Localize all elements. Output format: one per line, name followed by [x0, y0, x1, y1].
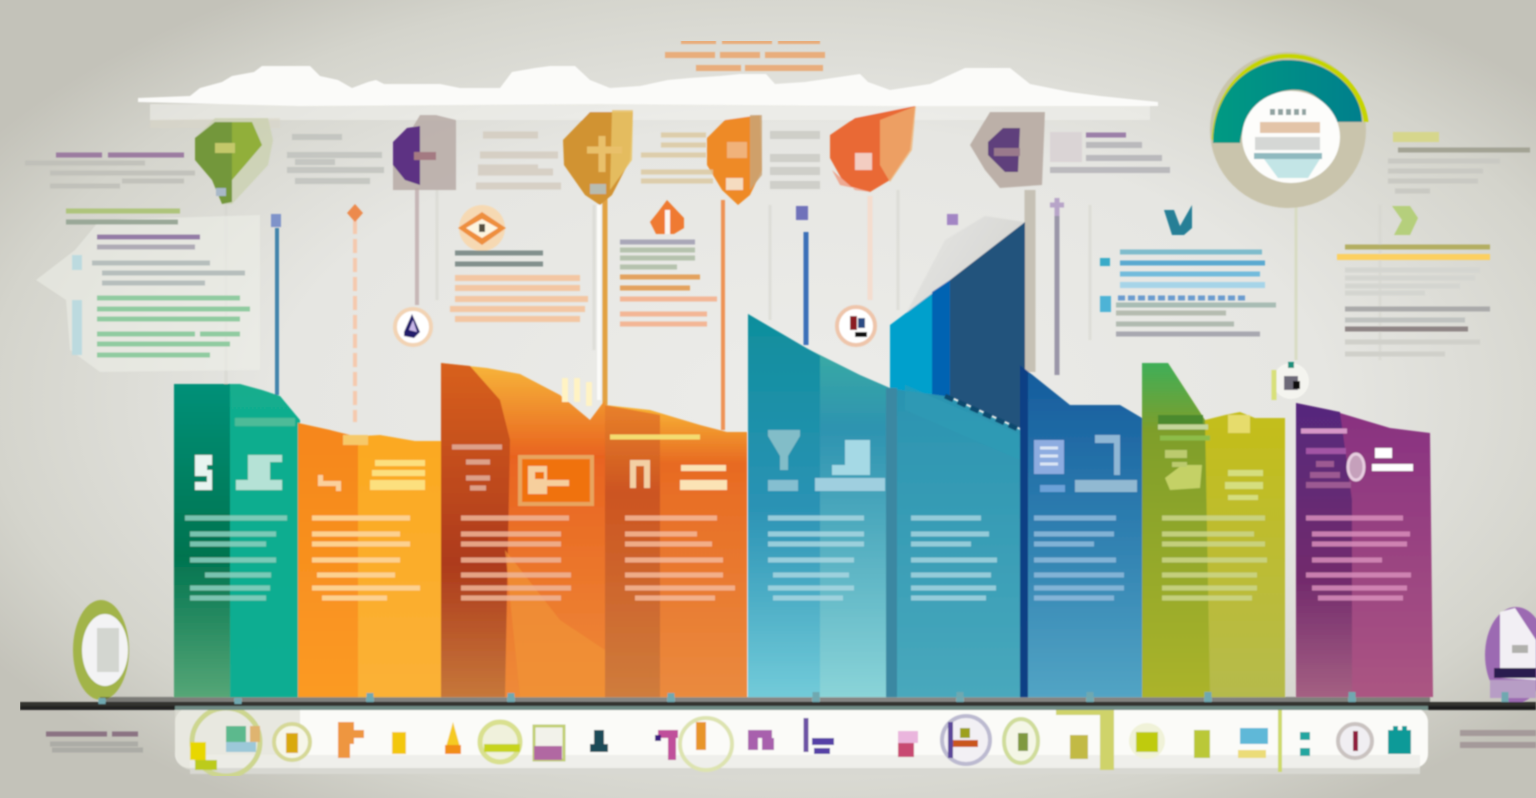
timeline bar: [20, 692, 1536, 710]
faint vertical guide lines: [226, 190, 1380, 385]
icon: funnel: [768, 430, 800, 470]
icon: node green: [1273, 362, 1309, 400]
cloud banner: [138, 66, 1158, 120]
icon: left oval badge: [73, 600, 129, 700]
icon: orange red glyphs: [630, 460, 727, 490]
icon: corner: [1095, 435, 1120, 475]
panel: blue: [1020, 365, 1142, 697]
icon: teal check: [1164, 205, 1192, 235]
text: blue panel: [1034, 518, 1124, 598]
icon: marker orange: [347, 204, 363, 222]
text block: far right list: [1337, 247, 1490, 354]
text: orange panel: [312, 518, 420, 598]
timeline ticks: [102, 692, 1505, 704]
text: deep orange panel: [461, 518, 571, 598]
icon: red ring small: [1338, 724, 1372, 758]
icon: large olive ring: [192, 708, 260, 776]
panel: sky blue: [748, 314, 890, 697]
pin: red orange: [830, 106, 916, 192]
text block: blue list: [1100, 252, 1276, 334]
icon: orange panel glyphs: [318, 460, 425, 491]
panel: purple: [1296, 403, 1433, 697]
text: purple panel: [1306, 518, 1411, 598]
callout: left arrow plate: [36, 215, 260, 372]
icon: marker purple: [947, 214, 958, 225]
label bars: [452, 447, 502, 488]
icon: flame: [445, 722, 461, 750]
panel: orange red: [605, 405, 747, 697]
text block: centre left: [450, 253, 588, 319]
text block: upper mid three: [641, 135, 713, 181]
icon: right oval badge: [1485, 607, 1536, 703]
panel: teal: [174, 384, 300, 697]
label: bottom left: [46, 734, 143, 750]
panel: blue peak background: [890, 216, 1025, 430]
icon: lime: [1129, 723, 1165, 759]
text block: upper mid four: [770, 135, 820, 185]
icon: green leaf: [1392, 206, 1418, 235]
text block: top left body: [25, 163, 195, 186]
icon: sun badge: [458, 205, 506, 251]
label: bottom right: [1460, 733, 1536, 745]
icon: purple flag: [804, 718, 808, 752]
icon: node red: [837, 307, 875, 345]
text block: upper mid one: [287, 137, 384, 181]
pin: amber: [563, 110, 633, 205]
panel: deep orange: [441, 363, 605, 697]
icon: orange block: [338, 722, 364, 758]
icon: node navy: [395, 309, 431, 345]
icon strip: [175, 706, 1428, 776]
icon: dark teal: [590, 730, 608, 752]
icon: olive block: [1056, 706, 1114, 770]
icon: amber ring: [274, 724, 310, 760]
icon: yellow tag: [392, 732, 406, 754]
icon: blue yellow: [1240, 728, 1268, 744]
icon: teal bar: [1388, 726, 1411, 754]
icon: flame badge: [650, 200, 684, 234]
icon: magenta: [658, 730, 678, 760]
icon: lime ring: [480, 722, 520, 762]
panel: orange: [298, 423, 441, 697]
text: teal panel: [185, 518, 287, 598]
text: orange red panel: [625, 518, 735, 598]
icon: marker navy: [796, 206, 808, 220]
text block: far right top: [1388, 132, 1530, 191]
bars: [1040, 485, 1065, 492]
icon: teal panel glyphs: [195, 455, 282, 490]
icon: framed chart: [520, 457, 592, 504]
pin: orange: [707, 115, 762, 205]
icon: purple glyphs: [1306, 448, 1413, 485]
panel: lime: [1142, 363, 1285, 697]
connector lines: [277, 188, 1296, 430]
title: [665, 41, 825, 68]
icon: large ring: [680, 718, 732, 770]
icon: yellow: [190, 742, 206, 760]
icon: purple tiles: [748, 730, 774, 750]
icon: pink: [898, 731, 918, 743]
text block: upper mid two: [476, 135, 561, 186]
icon: teal bits: [1300, 732, 1310, 756]
icon: marker lilac: [1050, 198, 1064, 216]
icon: pillars: [562, 378, 592, 406]
icon: teal block: [226, 726, 246, 742]
pin: green: [150, 118, 280, 204]
gauge: circular dial: [1210, 52, 1366, 208]
icon: lime small: [1194, 730, 1210, 758]
icon: red ring: [942, 716, 990, 764]
icon: amber bar: [696, 722, 706, 750]
icon: green ring: [1004, 719, 1038, 763]
icon: document: [1034, 440, 1064, 474]
panel: cyan: [886, 385, 1020, 697]
text block: centre right: [620, 242, 717, 324]
text: sky blue panel: [768, 518, 864, 598]
pin: purple left: [393, 115, 456, 190]
icon: marker blue: [271, 214, 281, 227]
text block: upper right one: [1050, 132, 1170, 170]
icon: laptop: [832, 440, 870, 475]
pin: purple right: [970, 112, 1045, 188]
icon: purple ring: [534, 726, 564, 760]
text block: left list: [66, 211, 250, 355]
text: cyan panel: [911, 518, 997, 598]
bar: [815, 478, 885, 491]
icon: lime glyphs: [1165, 450, 1263, 500]
text block: top left: [56, 152, 184, 158]
text: lime panel: [1162, 518, 1267, 598]
